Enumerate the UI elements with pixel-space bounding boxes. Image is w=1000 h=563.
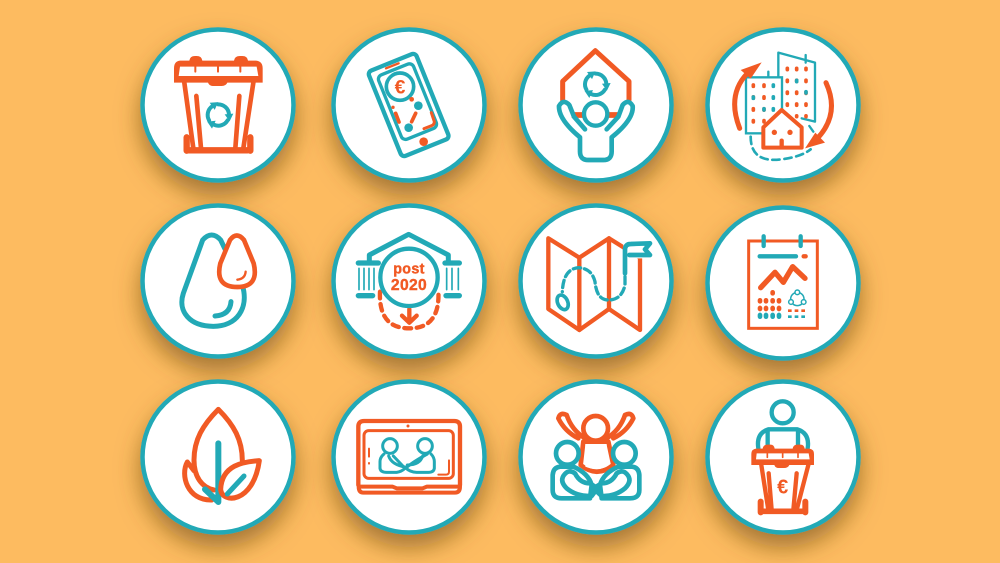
panel: euro bin podium — [708, 382, 858, 532]
panel: leaves — [142, 382, 294, 532]
icon: recycling bin — [174, 56, 263, 151]
icon: two water drops — [182, 235, 255, 326]
icon: institution with post 2020 — [358, 234, 459, 328]
icon: recycle arrows — [207, 102, 235, 131]
icon: institution with post 2020: 2020 — [391, 277, 427, 294]
panel: house and person — [520, 30, 672, 180]
panel: group of people — [520, 382, 672, 532]
panel: map — [520, 206, 672, 356]
panel: buildings — [708, 30, 858, 180]
icon: smartphone with euro: € — [395, 78, 406, 99]
icon: person at euro bin: € — [777, 476, 788, 498]
icon: person holding recycled house — [559, 51, 633, 160]
panel: recycling bin — [142, 30, 294, 180]
icon: person at euro bin — [751, 401, 814, 512]
icon: smartphone with euro — [368, 53, 450, 157]
panel: smartphone — [334, 30, 484, 180]
icon: calendar with charts — [749, 236, 817, 328]
icon: laptop with people shaking hands — [358, 421, 460, 493]
panel: post 2020 — [334, 206, 484, 356]
icon: buildings and house cycle — [735, 53, 831, 160]
panel: laptop — [334, 382, 484, 532]
panel: calendar chart — [708, 208, 858, 358]
icon: institution with post 2020: post — [393, 262, 425, 278]
icon: plant leaves — [185, 409, 259, 502]
panel: water drops — [142, 206, 294, 356]
icon: three people — [553, 414, 639, 498]
icon: map with route and flag — [548, 238, 652, 330]
